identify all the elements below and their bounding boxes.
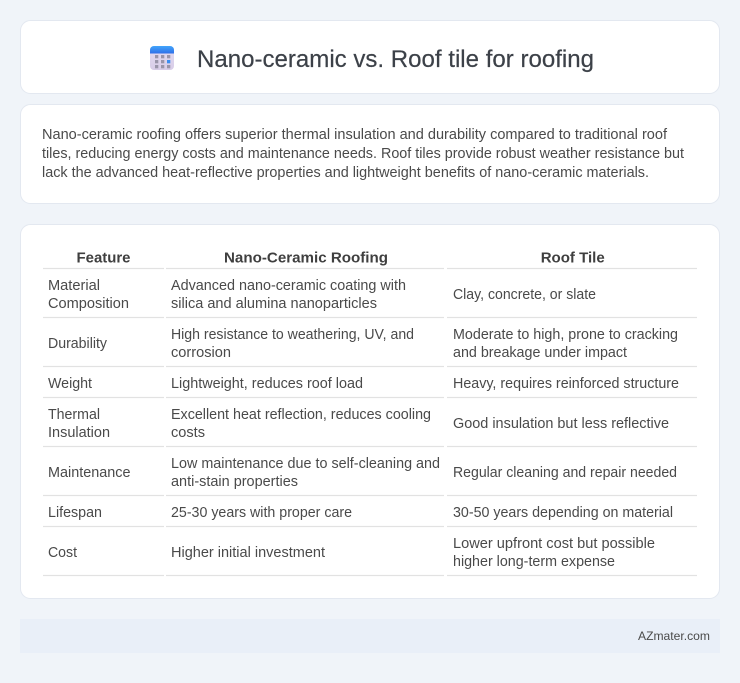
row: cost [48,536,655,570]
row: weight: Weight [48,376,92,392]
row: thermal insulation [48,407,669,441]
row: lifespan [48,505,673,521]
row: thermal insulation: Excellent heat reflection, reduces cooling [171,407,431,423]
text block: summary: Nano-ceramic roofing offers superior thermal insulation and durability compared to traditional roof [42,127,668,143]
row: maintenance: Regular cleaning and repair needed [453,465,677,481]
row: material composition: Composition [48,296,129,312]
table header: Nano-Ceramic Roofing [224,250,388,266]
row: maintenance: anti-stain properties [171,474,298,490]
panel: summary [20,104,720,204]
row: maintenance: Maintenance [48,465,130,481]
icon: calendar [150,46,174,70]
row: weight: Heavy, requires reinforced structure [453,376,679,392]
row: maintenance [48,456,677,490]
table header: Feature [76,250,130,266]
panel: comparison table [20,224,720,598]
row: lifespan: 30-50 years depending on material [453,505,673,521]
row: cost: Cost [48,545,77,561]
row: durability: Moderate to high, prone to cracking [453,327,678,343]
row: material composition: silica and alumina nanoparticles [171,296,377,312]
row: weight [48,376,679,392]
row: thermal insulation: Insulation [48,425,110,441]
panel: title header [20,20,720,94]
row: durability: Durability [48,336,108,352]
title: Nano-ceramic vs. Roof tile for roofing [197,46,594,73]
row: durability [48,327,678,361]
row: lifespan: 25-30 years with proper care [171,505,352,521]
text block: summary: tiles, reducing energy costs and maintenance needs. Roof tiles provide robust weather resistance but [42,146,684,162]
row: material composition: Advanced nano-ceramic coating with [171,278,406,294]
text block: summary: lack the advanced heat-reflective properties and lightweight benefits of nano-ceramic materials. [42,165,649,181]
row: durability: corrosion [171,345,231,361]
footer credit: AZmater.com [638,629,710,643]
table header: Roof Tile [541,250,605,266]
row: cost: Lower upfront cost but possible [453,536,655,552]
row: cost: higher long-term expense [453,554,615,570]
text block: summary [42,127,684,181]
row: thermal insulation: Good insulation but less reflective [453,416,669,432]
row: material composition: Material [48,278,100,294]
row: material composition: Clay, concrete, or slate [453,287,596,303]
row: durability: High resistance to weathering, UV, and [171,327,414,343]
row: thermal insulation: costs [171,425,205,441]
row: material composition [48,278,596,312]
row: thermal insulation: Thermal [48,407,100,423]
row: maintenance: Low maintenance due to self-cleaning and [171,456,440,472]
row: cost: Higher initial investment [171,545,325,561]
table header [76,250,605,266]
row: lifespan: Lifespan [48,505,102,521]
row: durability: and breakage under impact [453,345,627,361]
row: weight: Lightweight, reduces roof load [171,376,363,392]
footer [20,619,720,653]
